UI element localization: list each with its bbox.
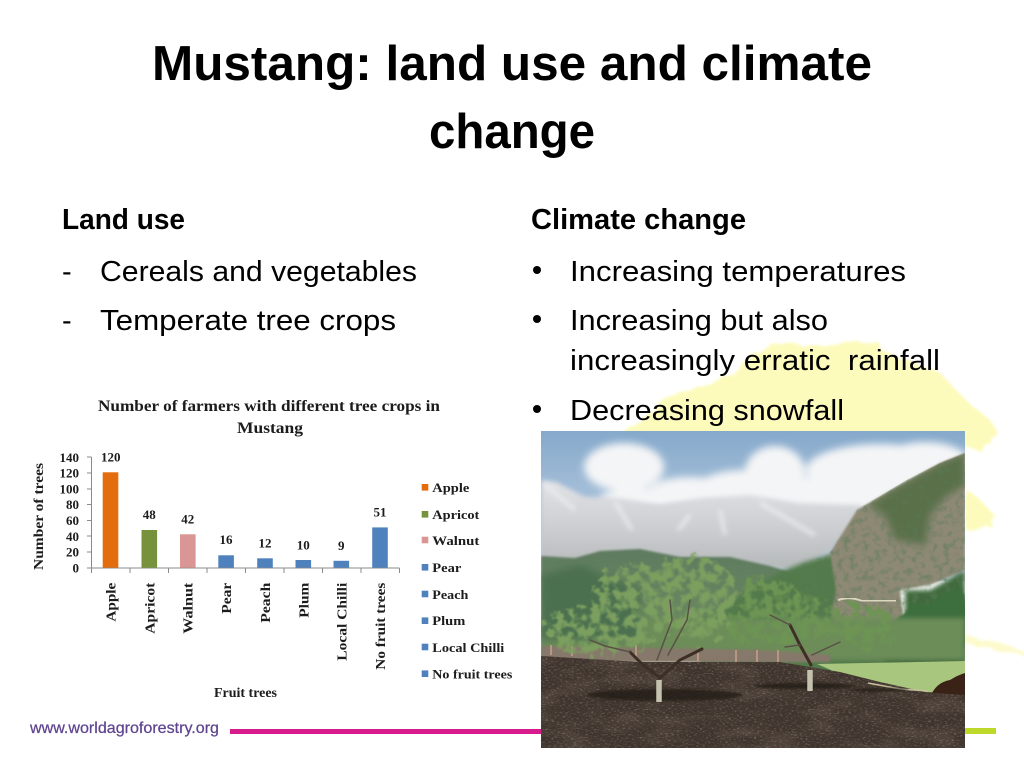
value labels: 16	[220, 532, 233, 547]
panel: land use	[62, 204, 417, 337]
value labels: 12	[258, 535, 272, 550]
y axis labels: 100	[60, 482, 79, 496]
forest on cliff	[868, 453, 965, 680]
legend: Apricot	[432, 507, 480, 522]
heading: land use: Land use	[62, 204, 185, 236]
sky	[541, 431, 965, 581]
legend: Walnut	[432, 533, 480, 548]
fence strip	[541, 646, 830, 662]
category labels	[104, 582, 388, 670]
value labels: 9	[338, 538, 345, 553]
value labels: 51	[374, 505, 386, 520]
y axis labels: 80	[66, 497, 79, 512]
axes	[87, 457, 400, 573]
chart title: Number of farmers with different tree crops in	[98, 398, 440, 415]
list item: decreasing snowfall: Decreasing snowfall	[570, 395, 844, 427]
dark band left	[541, 565, 640, 640]
list item: temperate tree crops: -	[62, 305, 72, 337]
photo: apple trees in Mustang valley	[541, 431, 969, 748]
category labels: Pear	[219, 583, 234, 614]
value labels: 10	[297, 537, 310, 552]
category labels: Walnut	[181, 582, 196, 634]
y axis labels: 120	[60, 466, 79, 480]
list item: erratic rainfall: Increasing but also	[570, 305, 828, 337]
mid-ground green	[541, 618, 965, 660]
heading: climate change: Climate change	[531, 204, 746, 236]
yellow paint splash background	[622, 340, 1024, 656]
y axis labels	[60, 450, 79, 576]
value labels: 48	[143, 507, 156, 522]
value labels: 120	[101, 450, 120, 465]
category labels: Local Chilli	[334, 582, 349, 661]
y axis labels: 0	[72, 560, 79, 576]
right forest slope	[700, 553, 965, 680]
rocky cliff	[830, 453, 965, 640]
legend	[422, 480, 512, 682]
y axis labels: 60	[66, 513, 79, 528]
y axis title: Number of trees	[31, 463, 46, 570]
tree canopies	[547, 556, 893, 654]
dark soil mound	[932, 673, 965, 695]
legend: Plum	[432, 613, 465, 628]
tree shadows	[587, 683, 908, 701]
panel: climate change	[531, 204, 940, 427]
legend: Apple	[432, 480, 470, 495]
legend: No fruit trees	[432, 666, 512, 682]
category labels: Plum	[296, 582, 311, 618]
bar chart: number of farmers with different tree crops	[31, 398, 512, 700]
title: change	[429, 105, 595, 159]
y axis labels: 40	[66, 529, 79, 544]
chart title: Mustang	[237, 420, 303, 437]
footer website url: www.worldagroforestry.org	[29, 720, 219, 737]
legend: Peach	[432, 587, 469, 602]
y axis labels: 20	[66, 544, 79, 560]
value labels	[101, 450, 386, 553]
footer green line	[965, 728, 996, 734]
path	[868, 683, 928, 691]
legend: Pear	[432, 560, 462, 575]
list item: cereals and vegetables: Cereals and vegetables	[100, 256, 417, 288]
title	[152, 37, 872, 159]
list item: cereals and vegetables: -	[62, 256, 72, 288]
category labels: Apricot	[142, 582, 157, 634]
clouds	[584, 442, 969, 519]
distant forested hills	[541, 548, 788, 656]
bars	[103, 472, 388, 568]
list item: erratic rainfall: increasingly erratic rainfall	[570, 345, 940, 377]
category labels: Peach	[258, 582, 273, 623]
value labels: 42	[181, 511, 194, 526]
y axis labels: 140	[60, 450, 79, 465]
list item: increasing temperatures: Increasing temperatures	[570, 256, 906, 288]
fence	[550, 645, 779, 662]
cliff road	[838, 598, 896, 601]
chart title	[98, 398, 440, 437]
legend: Local Chilli	[432, 640, 505, 655]
grass field	[817, 661, 965, 692]
tree trunks and branches	[590, 600, 840, 702]
list item: temperate tree crops: Temperate tree crops	[100, 305, 396, 337]
category labels: Apple	[104, 583, 119, 622]
title: Mustang: land use and climate	[152, 37, 872, 91]
ground	[541, 656, 965, 748]
category labels: No fruit trees	[373, 583, 388, 670]
footer magenta line	[230, 729, 542, 734]
x axis title: Fruit trees	[214, 685, 277, 700]
snowy mountains	[541, 480, 880, 570]
list item: erratic rainfall	[533, 305, 940, 377]
lower forest right	[896, 588, 965, 647]
